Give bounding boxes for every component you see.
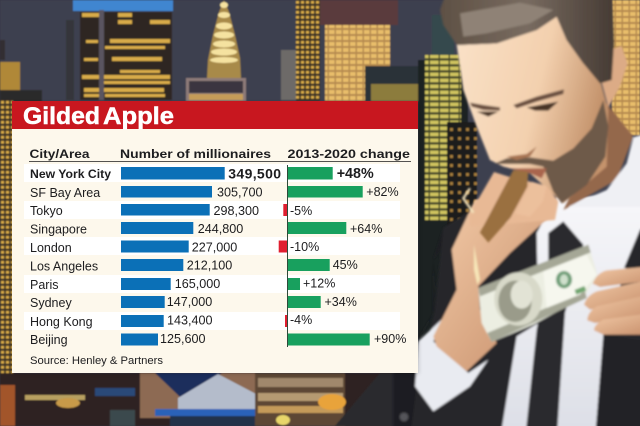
city labels: Sydney	[30, 296, 72, 310]
millionaire values: 212,100	[187, 258, 232, 272]
city labels: Singapore	[30, 222, 87, 236]
man: match stick	[463, 188, 473, 213]
city labels: New York City	[30, 167, 111, 181]
title	[23, 103, 174, 130]
building: far-left low blocks	[0, 40, 42, 102]
bar chart: number of millionaires	[121, 167, 225, 346]
man: ear	[600, 46, 628, 107]
millionaire values: 298,300	[214, 204, 259, 218]
man: collar	[568, 133, 640, 207]
city labels	[30, 167, 111, 347]
change values	[290, 166, 406, 346]
man: eyes	[477, 112, 498, 117]
panel: chart card	[12, 101, 418, 373]
building: left window strip	[0, 100, 13, 374]
man: dark tie	[525, 221, 583, 426]
column headers: Number of millionaires	[120, 147, 271, 161]
column headers: 2013-2020 change	[288, 147, 410, 161]
change values: +48%	[337, 166, 374, 182]
change values: +64%	[350, 222, 382, 236]
man: elbow of jacket	[335, 373, 440, 426]
man: right lapel	[624, 220, 640, 268]
millionaire values: 143,400	[167, 314, 213, 328]
city labels: Beijing	[30, 333, 68, 347]
change values: +82%	[366, 185, 399, 199]
bill: portrait oval	[494, 272, 542, 326]
man: white shirt	[500, 196, 640, 426]
man: upper body and suit	[393, 196, 640, 426]
man: fingers and cigar	[470, 170, 558, 243]
source note: Source: Henley & Partners	[30, 355, 163, 367]
man: beard	[495, 100, 608, 203]
building: left tower with blue crown	[66, 0, 173, 100]
millionaire values: 165,000	[175, 277, 220, 291]
change values: +34%	[324, 295, 357, 309]
man: cufflink	[400, 413, 408, 421]
millionaire values: 305,700	[217, 186, 263, 200]
building: towers behind the man	[418, 0, 640, 350]
man: left hand	[433, 200, 557, 371]
millionaire values	[160, 166, 281, 346]
man: eyebrows	[470, 103, 500, 111]
shadow: chart panel soft edge	[13, 103, 419, 374]
man: head	[440, 0, 640, 243]
change values: -5%	[290, 204, 312, 218]
man: dollar bill	[478, 245, 597, 342]
row bands	[24, 164, 400, 330]
title: Apple	[103, 103, 174, 130]
change values: -4%	[290, 313, 312, 327]
change values: 45%	[333, 258, 358, 272]
city labels: SF Bay Area	[30, 186, 100, 200]
bar chart: 2013-2020 change	[279, 165, 370, 347]
man with cigar and dollar bill	[335, 0, 640, 426]
man: face	[457, 17, 608, 203]
header band	[12, 101, 418, 130]
strip: harbour buildings along the bottom	[0, 373, 440, 426]
man: hair	[440, 0, 614, 83]
millionaire values: 125,600	[160, 332, 206, 346]
millionaire values: 147,000	[167, 295, 212, 309]
change values: +12%	[303, 276, 335, 290]
millionaire values: 227,000	[192, 240, 237, 254]
column headers: City/Area	[30, 147, 90, 161]
city labels: Paris	[30, 278, 58, 292]
change values: -10%	[290, 240, 319, 254]
building: Chrysler spire	[186, 0, 246, 101]
bill: green seal	[556, 271, 572, 288]
city labels: Tokyo	[30, 204, 63, 218]
man: neck	[563, 103, 633, 210]
millionaire values: 244,800	[198, 222, 243, 236]
man: flame glow	[474, 245, 480, 285]
man: lips	[510, 168, 547, 178]
man: shirt cuff	[415, 316, 488, 411]
city labels: London	[30, 241, 72, 255]
change values: +90%	[374, 332, 406, 346]
millionaire values: 349,500	[228, 166, 281, 182]
city labels: Hong Kong	[30, 315, 93, 329]
column headers	[29, 147, 411, 162]
building: right towers	[281, 0, 420, 101]
title: Gilded	[23, 103, 100, 130]
man: right hand fingers	[584, 266, 640, 335]
man: nose	[507, 147, 537, 160]
city labels: Los Angeles	[30, 260, 98, 274]
